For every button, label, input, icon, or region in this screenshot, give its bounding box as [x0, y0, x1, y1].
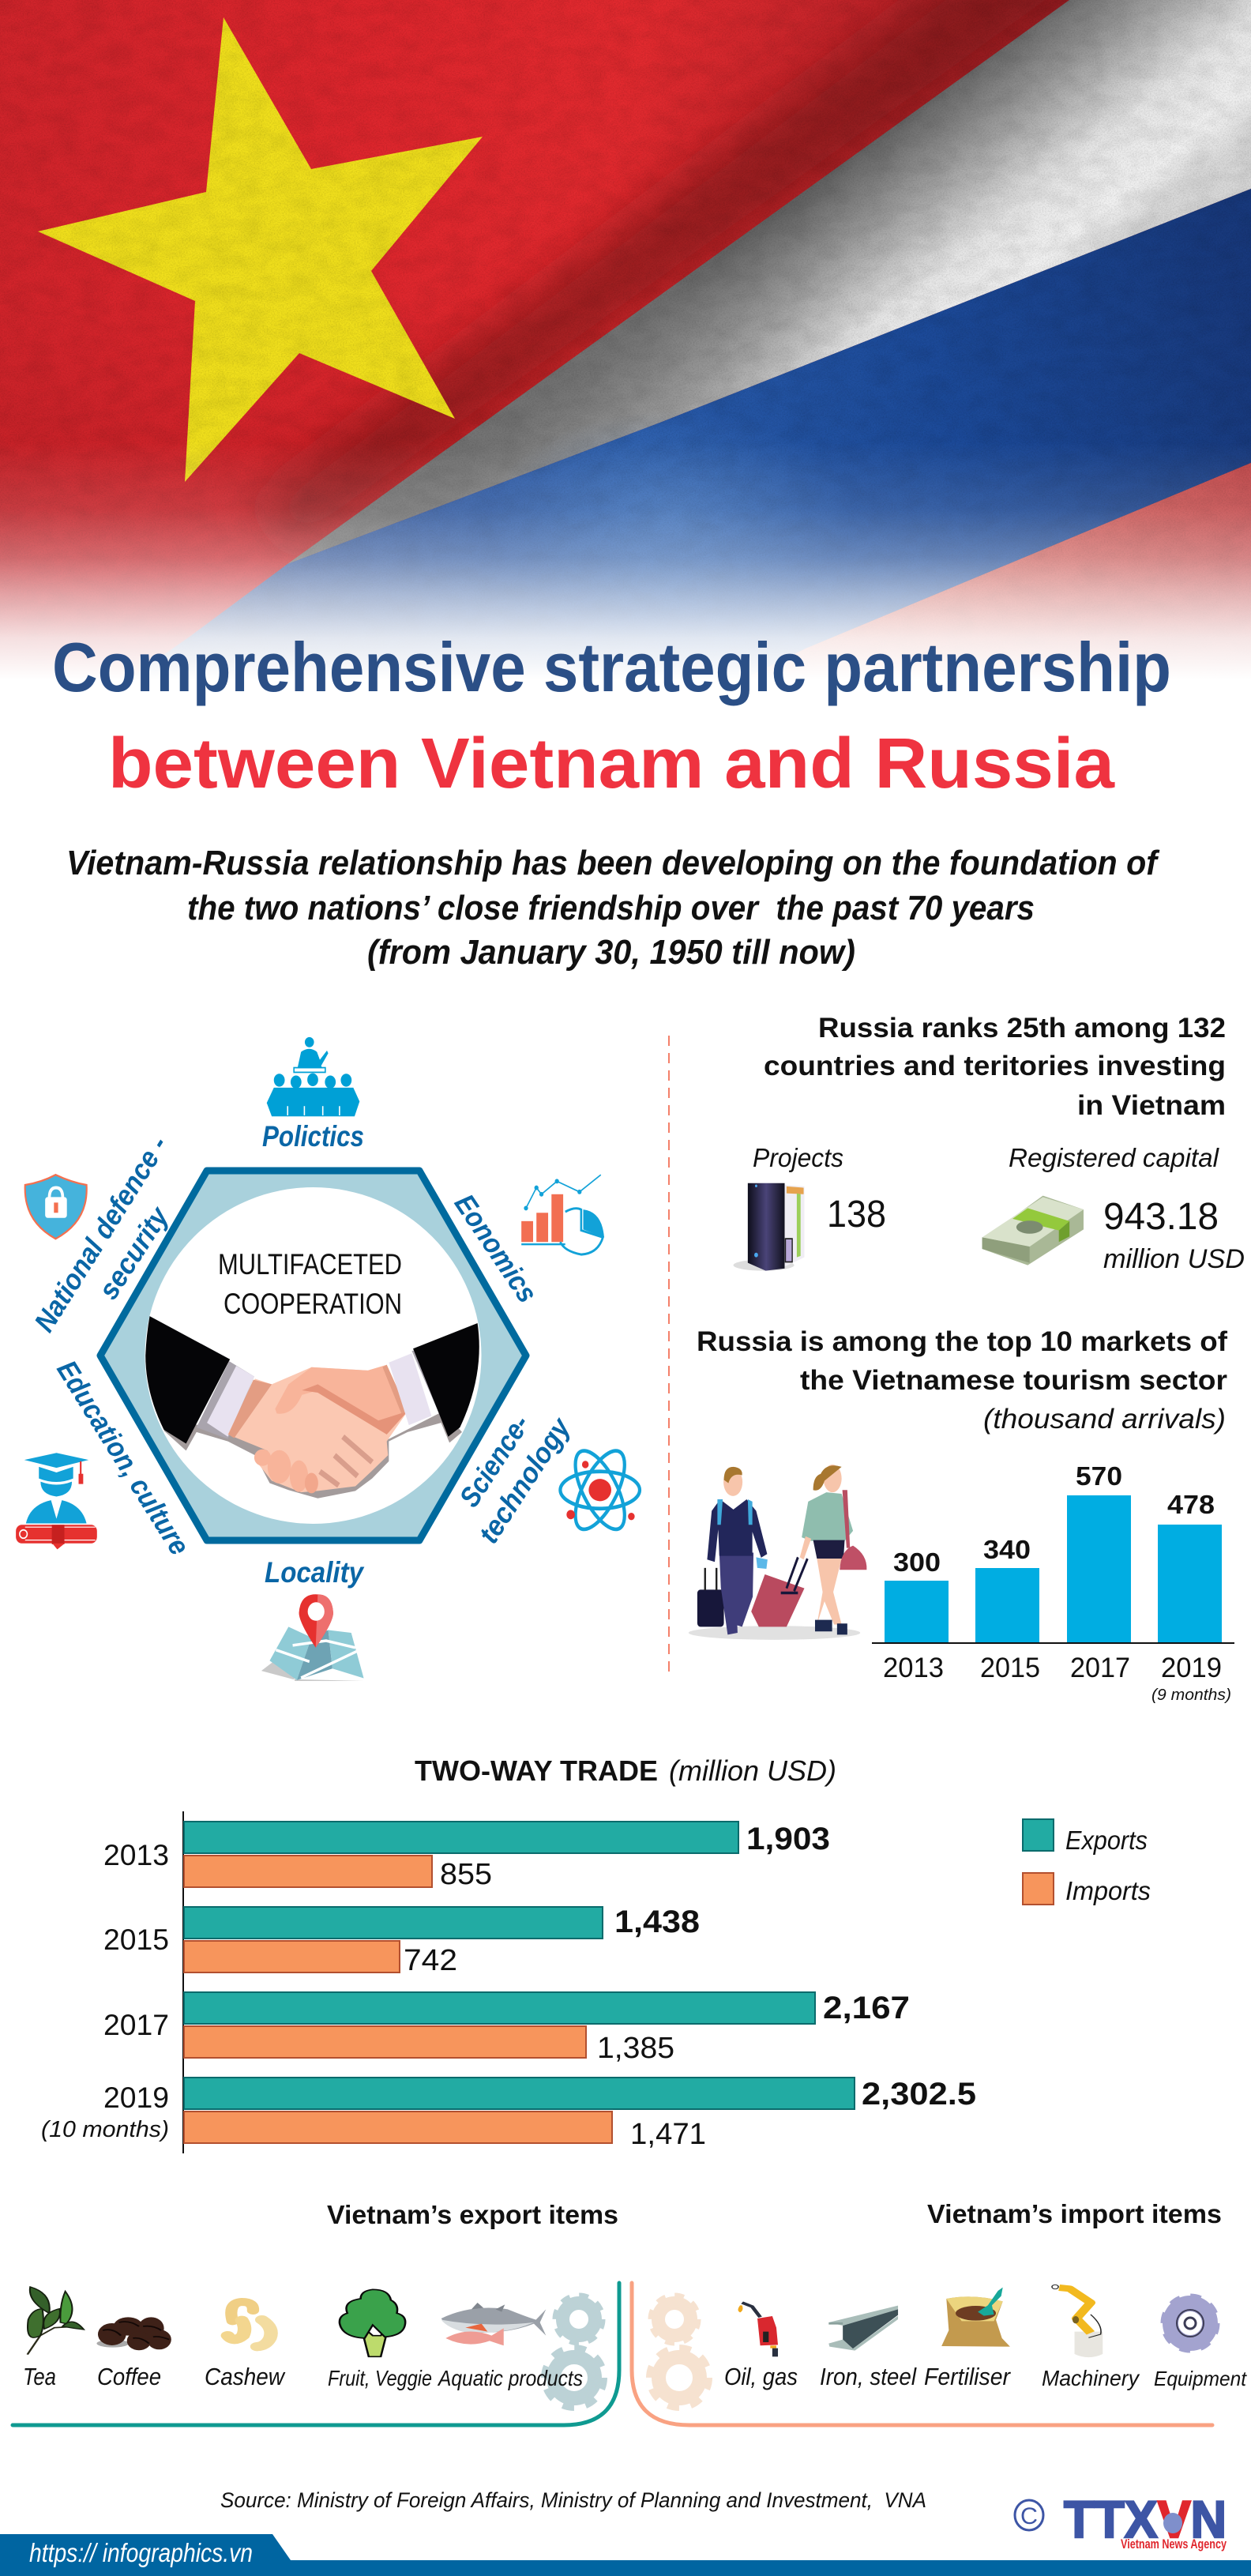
red suitcase — [751, 1574, 805, 1626]
bar chart: tourist arrivals — [872, 1461, 1234, 1704]
2015 bars: 742 — [404, 1944, 457, 1977]
heading: import items: Vietnam’s import items — [927, 2199, 1222, 2228]
label: Eonomics: Eonomics — [449, 1188, 544, 1308]
title: between Vietnam and Russia — [108, 724, 1115, 803]
2019 bars — [41, 2077, 976, 2151]
bar chart: tourist arrivals: 478 — [1167, 1490, 1215, 1519]
bar chart: tourist arrivals: 570 — [1076, 1461, 1122, 1491]
icon: security shield — [25, 1175, 87, 1239]
bar chart: tourist arrivals: (9 months) — [1151, 1687, 1231, 1704]
label: Science-technology: Science- — [453, 1409, 535, 1513]
2019 bars: 2,302.5 — [862, 2077, 976, 2112]
icon: politics audience and speaker — [267, 1037, 359, 1116]
2013 bars: 2013 — [103, 1839, 169, 1871]
import item labels: Equipment — [1154, 2367, 1248, 2390]
heading: export items: Vietnam’s export items — [327, 2200, 618, 2229]
label: Education, culture: Education, culture — [51, 1355, 196, 1561]
stat: projects: 138 — [827, 1194, 886, 1235]
icon: fish — [441, 2303, 546, 2345]
source text: Source: Ministry of Foreign Affairs, Ministry of Planning and Investment, VNA — [220, 2488, 926, 2512]
legend — [1023, 1819, 1151, 1905]
title — [52, 628, 1171, 803]
2017 bars: 2,167 — [823, 1991, 910, 2025]
heading: tourism: (thousand arrivals) — [983, 1404, 1226, 1435]
2015 bars — [103, 1905, 700, 1977]
heading: tourism — [697, 1326, 1227, 1435]
label: National defence - security: security — [92, 1200, 175, 1305]
import item labels — [724, 2363, 1248, 2390]
heading: tourism: the Vietnamese tourism sector — [800, 1365, 1227, 1396]
heading: two-way trade: (million USD) — [669, 1754, 836, 1787]
footer bar with URL — [0, 2534, 1251, 2576]
icon: money stack — [982, 1196, 1084, 1265]
legend: Exports — [1065, 1826, 1148, 1855]
bar chart: tourist arrivals: 2019 — [1161, 1653, 1222, 1683]
icon: steel beam — [828, 2306, 898, 2351]
intro text: the two nations’ close friendship over the past 70 years — [187, 889, 1035, 927]
panel: multifaceted cooperation hexagon — [100, 1171, 526, 1540]
2013 bars: 1,903 — [746, 1822, 830, 1856]
stat: registered capital — [982, 1143, 1245, 1274]
2019 bars: 2019 — [103, 2081, 169, 2114]
label: National defence - security: National defence - — [28, 1130, 174, 1337]
intro text: (from January 30, 1950 till now) — [367, 933, 855, 972]
heading: two-way trade — [415, 1754, 836, 1787]
icon: education graduate and scroll — [16, 1453, 97, 1549]
icon: server — [734, 1183, 805, 1271]
icon: coffee — [96, 2317, 171, 2350]
heading: tourism: Russia is among the top 10 markets of — [697, 1326, 1227, 1357]
label: Polictics: Polictics — [262, 1120, 364, 1153]
2017 bars: 2017 — [103, 2009, 169, 2041]
export item labels: Fruit, Veggie — [328, 2366, 432, 2390]
2019 bars: (10 months) — [41, 2117, 169, 2142]
icon: tea — [28, 2287, 84, 2355]
heading: investment rank: Russia ranks 25th among 132 — [818, 1013, 1226, 1044]
icon: map and location pin — [261, 1594, 364, 1681]
icon: globe on logo — [1163, 2513, 1182, 2533]
bar chart: tourist arrivals: 2017 — [1070, 1653, 1130, 1683]
footer bar with URL: https:// infographics.vn — [29, 2538, 253, 2567]
import item labels: Oil, gas — [724, 2363, 798, 2390]
logo: TTXVN: TTXVN — [1064, 2490, 1227, 2548]
bar chart: tourist arrivals: 2015 — [980, 1653, 1040, 1683]
dashed divider — [668, 1036, 670, 1678]
icon: handshake — [145, 1316, 479, 1499]
2015 bars: 2015 — [103, 1924, 169, 1956]
hero image: crossed Vietnam and Russia flags — [0, 0, 1251, 703]
heading: investment rank: countries and teritories investing — [764, 1051, 1226, 1081]
icon: economics chart — [521, 1175, 604, 1254]
intro text: Vietnam-Russia relationship has been developing on the foundation of — [66, 844, 1160, 882]
icon: cashew — [227, 2302, 271, 2347]
woman — [802, 1492, 853, 1541]
export item labels: Cashew — [205, 2363, 286, 2390]
import item labels: Fertiliser — [924, 2363, 1012, 2390]
intro text — [66, 844, 1160, 972]
hexagon frame — [100, 1171, 526, 1540]
icon: broccoli — [340, 2289, 405, 2356]
stat: projects: Projects — [753, 1143, 843, 1172]
bar chart: two-way trade — [41, 1811, 976, 2153]
icon: fuel nozzle — [738, 2303, 778, 2356]
export item labels: Aquatic products — [437, 2366, 583, 2390]
heading: investment rank: in Vietnam — [1077, 1090, 1226, 1121]
legend: Imports — [1065, 1876, 1151, 1905]
icon: atom science — [560, 1442, 640, 1537]
label: Locality: Locality — [265, 1556, 365, 1589]
stat: projects — [734, 1143, 886, 1271]
2013 bars — [103, 1822, 830, 1891]
bar chart: tourist arrivals: 2013 — [883, 1653, 944, 1683]
center label: MULTIFACETED — [218, 1248, 402, 1280]
2017 bars — [103, 1991, 910, 2065]
2019 bars: 1,471 — [630, 2118, 706, 2151]
icon: travellers with luggage — [689, 1465, 866, 1640]
bar chart: tourist arrivals: 340 — [983, 1535, 1031, 1564]
export item labels: Coffee — [97, 2363, 161, 2390]
center label — [218, 1248, 402, 1320]
icon: fertiliser sack — [941, 2288, 1010, 2347]
2015 bars: 1,438 — [614, 1905, 700, 1939]
icon: equipment gear — [1163, 2296, 1217, 2350]
label: Science-technology: technology — [472, 1411, 577, 1549]
panel: export items frame with gears — [13, 2283, 619, 2425]
2013 bars: 855 — [440, 1858, 492, 1891]
export item labels — [23, 2363, 583, 2390]
import item labels: Iron, steel — [820, 2363, 917, 2390]
center label: COOPERATION — [224, 1288, 402, 1320]
export item labels: Tea — [23, 2363, 56, 2390]
heading: investment rank — [764, 1013, 1226, 1121]
bar chart: tourist arrivals: 300 — [893, 1547, 941, 1577]
import item labels: Machinery — [1042, 2366, 1140, 2390]
logo: TTXVN: C — [1020, 2503, 1038, 2529]
heading: two-way trade: TWO-WAY TRADE — [415, 1754, 658, 1787]
icon: robot arm — [1052, 2285, 1103, 2357]
man — [697, 1589, 724, 1626]
icon: yellow star — [38, 17, 483, 482]
2017 bars: 1,385 — [597, 2032, 674, 2065]
stat: registered capital: 943.18 — [1103, 1196, 1219, 1238]
inner circle — [145, 1187, 482, 1524]
stat: registered capital: Registered capital — [1009, 1143, 1220, 1172]
panel: import items frame with gears — [632, 2283, 1212, 2425]
title: Comprehensive strategic partnership — [52, 628, 1171, 706]
stat: registered capital: million USD — [1103, 1244, 1245, 1274]
